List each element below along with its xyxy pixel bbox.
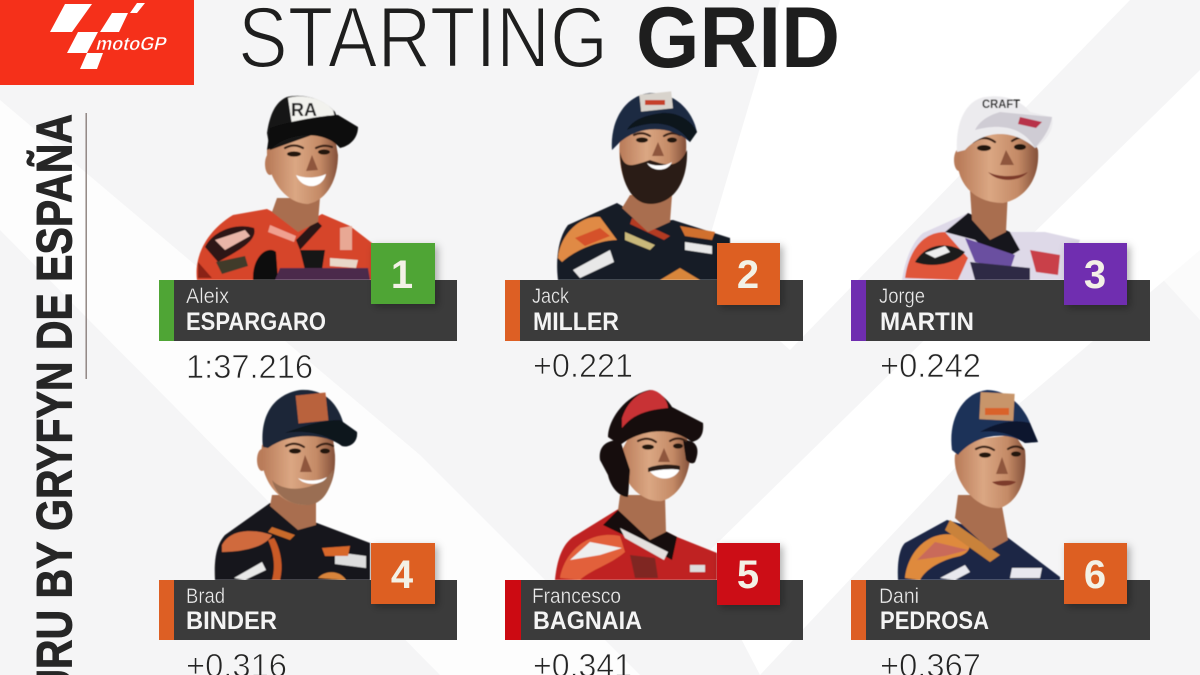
name bar: BINDER	[186, 607, 277, 635]
portrait: Jorge Martin	[902, 96, 1080, 280]
name bar: MARTIN	[880, 308, 974, 336]
panel: rider 2 Miller	[505, 91, 803, 384]
name bar	[851, 580, 1150, 640]
position badge 5: 5	[737, 553, 759, 597]
name bar	[851, 280, 1150, 341]
position badge 2	[717, 243, 780, 305]
name bar	[505, 280, 803, 341]
name bar: Aleix	[186, 285, 229, 308]
position badge 1: 1	[391, 253, 413, 297]
position badge 4	[371, 543, 435, 604]
panel: rider 3 Martin	[851, 96, 1150, 384]
position badge 5	[717, 543, 780, 605]
portrait: Jorge Martin: CRAFT	[982, 97, 1021, 111]
name bar	[505, 580, 803, 640]
name bar: Jack	[532, 285, 569, 308]
name bar	[159, 280, 457, 341]
portrait: Dani Pedrosa	[898, 390, 1060, 580]
logo: MotoGP: motoGP	[94, 34, 169, 55]
panel: rider 6 Pedrosa	[851, 390, 1150, 675]
name bar: Francesco	[532, 585, 621, 608]
position badge 3	[1064, 243, 1127, 305]
panel: rider 5 Bagnaia	[505, 390, 803, 675]
lap time: +0.221	[533, 347, 633, 384]
name bar: Jorge	[879, 285, 925, 308]
lap time: +0.242	[880, 347, 981, 384]
name bar: MILLER	[533, 308, 619, 336]
position badge 4: 4	[391, 553, 414, 597]
logo: MotoGP	[0, 0, 194, 85]
name bar: Dani	[879, 585, 919, 608]
panel: rider 4 Binder	[159, 390, 457, 675]
portrait: Jack Miller	[557, 91, 730, 280]
name bar: BAGNAIA	[533, 607, 642, 635]
portrait: Aleix Espargaro	[197, 96, 372, 280]
portrait: Francesco Bagnaia	[555, 390, 717, 580]
position badge 3: 3	[1084, 253, 1106, 297]
position badge 6	[1064, 543, 1127, 604]
name bar: PEDROSA	[880, 607, 989, 635]
portrait: Brad Binder	[215, 390, 370, 580]
name bar	[159, 580, 457, 640]
name bar: ESPARGARO	[186, 308, 326, 336]
name bar: Brad	[186, 585, 225, 608]
position badge 6: 6	[1084, 553, 1106, 597]
portrait: Aleix Espargaro: RA	[291, 100, 317, 120]
position badge 1	[371, 243, 435, 304]
panel: rider 1 Espargaro	[159, 96, 457, 385]
position badge 2: 2	[737, 253, 759, 297]
lap time: 1:37.216	[186, 348, 313, 385]
